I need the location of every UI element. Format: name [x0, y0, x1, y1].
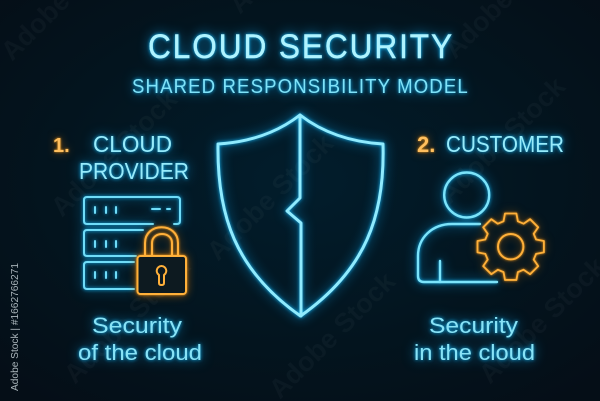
caption: security in the cloud — [414, 313, 535, 365]
watermark: Adobe Stock — [433, 71, 572, 209]
icon: gear — [477, 213, 544, 280]
watermark: Adobe Stock — [58, 251, 197, 389]
heading: cloud provider — [53, 131, 172, 157]
subtitle: SHARED RESPONSIBILITY MODEL — [132, 76, 468, 98]
shield outline — [218, 115, 383, 316]
icon: person — [418, 172, 497, 282]
caption: security of the cloud: Security — [92, 313, 182, 338]
number 1: 1. — [53, 135, 70, 157]
stock id side label: Adobe Stock | #1662766271 — [9, 263, 21, 391]
watermark: Adobe Stock — [263, 266, 402, 401]
caption: security of the cloud — [78, 313, 202, 365]
provider label second line: PROVIDER — [79, 158, 189, 184]
shield split line — [287, 115, 301, 316]
watermark: Adobe Stock — [45, 84, 184, 222]
heading: customer — [417, 131, 564, 157]
shield — [218, 115, 383, 316]
caption: security of the cloud: of the cloud — [78, 340, 202, 365]
icon: padlock — [138, 227, 186, 294]
title: CLOUD SECURITY — [148, 27, 452, 65]
icon: server stack — [84, 197, 180, 289]
provider label: CLOUD — [93, 131, 172, 157]
watermark: Adobe Stock — [201, 128, 340, 266]
caption: security in the cloud: Security — [429, 313, 518, 338]
customer label: CUSTOMER — [446, 131, 564, 157]
caption: security in the cloud: in the cloud — [414, 340, 535, 365]
number 2: 2. — [417, 132, 435, 157]
